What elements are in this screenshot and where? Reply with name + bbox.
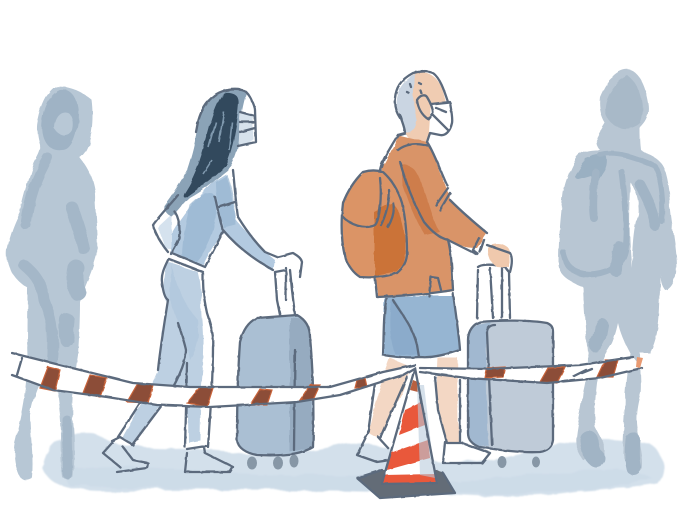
suitcase outline and handle (237, 268, 313, 455)
man: backpack (342, 135, 428, 277)
man: mask (429, 102, 452, 135)
backpack dark wash (374, 203, 405, 276)
silhouette: face highlight and dark strokes (24, 90, 84, 475)
suitcase blue strip (468, 322, 490, 446)
cone base mat (357, 470, 455, 498)
silhouette: arm gap (630, 183, 638, 268)
suitcase body (237, 315, 313, 455)
tape brown stripes (40, 360, 618, 407)
face (238, 93, 256, 146)
ground wash (43, 432, 663, 496)
suitcase outline and handle (468, 265, 553, 452)
man: suitcase (468, 265, 553, 468)
suitcase body (468, 321, 553, 452)
tape orange end (636, 357, 643, 368)
woman: pencil outline (103, 89, 302, 472)
man: shorts (383, 296, 460, 357)
barrier tape (12, 353, 643, 407)
backpack wash (342, 170, 407, 277)
figure: woman with long hair and suitcase (103, 89, 313, 472)
suitcase shaded strip (290, 317, 313, 452)
silhouette: dark strap and backpack strokes (563, 76, 663, 468)
man: orange jacket (375, 135, 487, 297)
suitcase wheels (247, 454, 298, 470)
woman: hair (163, 89, 256, 217)
hair base (163, 89, 247, 217)
tape white band (12, 353, 642, 407)
cone blue reflection (417, 385, 435, 478)
figure: left background silhouette (7, 87, 97, 479)
man: pencil outline (342, 135, 428, 277)
traffic cone (357, 368, 455, 498)
man: back of head shading (396, 74, 417, 132)
woman: back arm hint (158, 215, 172, 250)
man: head, jacket, legs pencil outline (357, 72, 512, 463)
figure: right background silhouette with backpack (558, 70, 676, 474)
man: skin wash (368, 72, 510, 443)
cone orange stripes (382, 380, 436, 483)
woman: suitcase (237, 268, 313, 470)
tape edge lines (12, 353, 642, 407)
woman: trousers (122, 262, 203, 444)
woman: torso and arm (172, 174, 275, 272)
woman: clothing wash (122, 174, 275, 444)
cone white body (382, 368, 437, 483)
figure: man with backpack and suitcase (342, 72, 553, 468)
cone outline (357, 368, 455, 498)
hair light streaks (203, 112, 232, 174)
hair dark core (183, 93, 239, 197)
suitcase wheels (498, 456, 540, 468)
